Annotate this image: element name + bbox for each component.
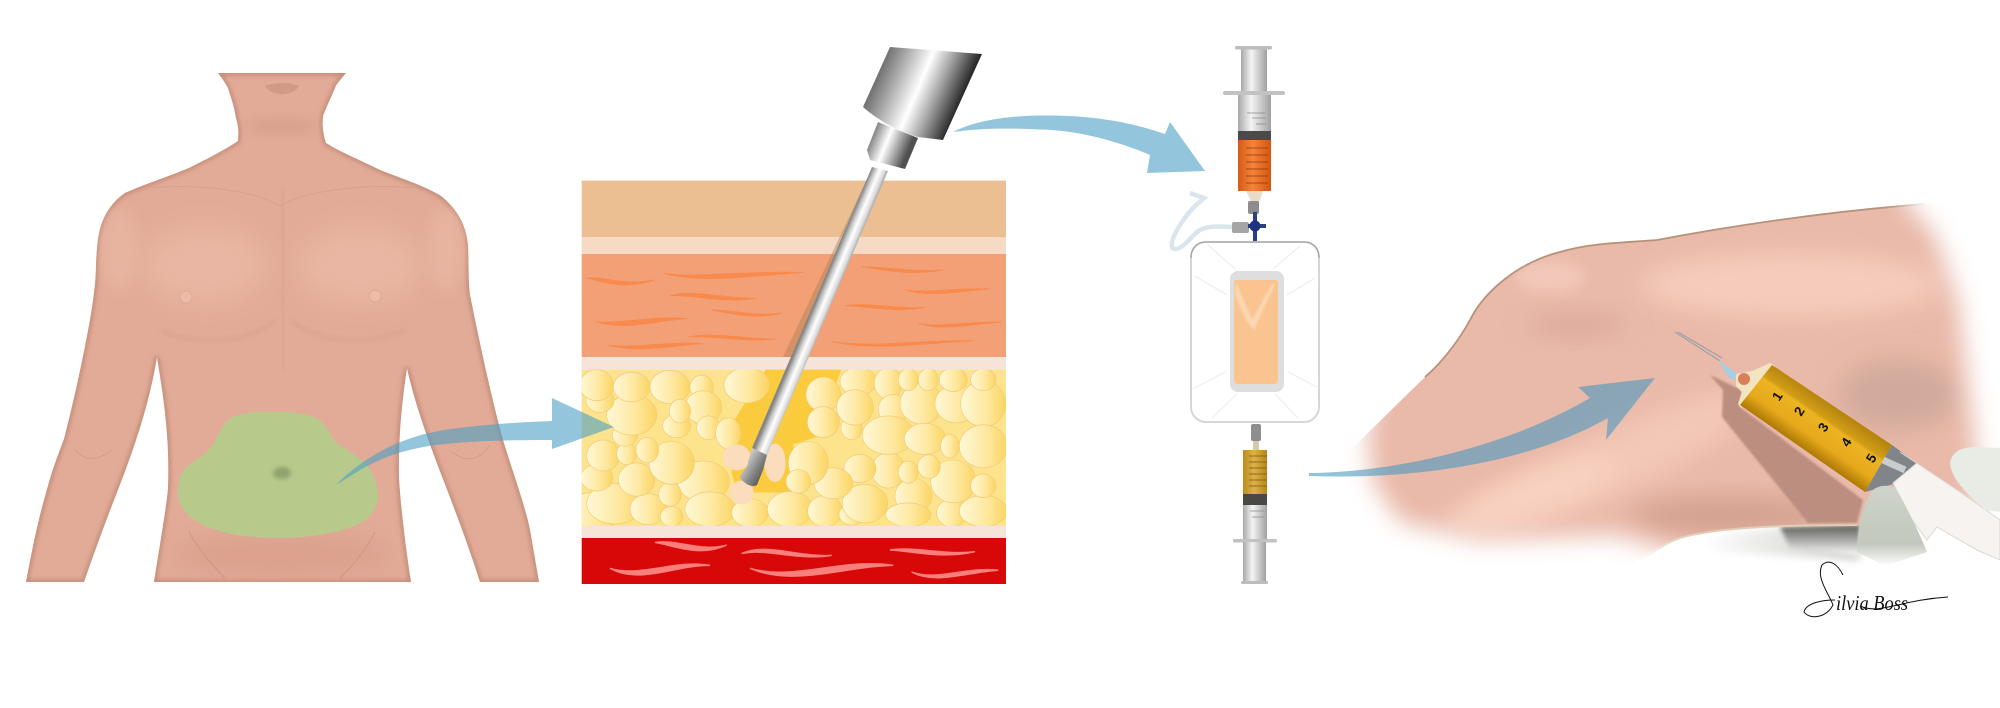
needle xyxy=(1675,332,1722,361)
skin layer xyxy=(582,181,1006,237)
injection syringe xyxy=(1675,332,2000,560)
fascia band bottom xyxy=(582,526,1006,538)
dermis band xyxy=(582,237,1006,254)
cannula shaft xyxy=(752,167,888,455)
volume numbers: 1 xyxy=(1769,389,1786,404)
collar xyxy=(867,122,918,165)
panel: patient torso with donor site xyxy=(26,73,539,582)
handle block xyxy=(863,47,982,140)
fat layer base xyxy=(582,370,1006,526)
volume numbers: 2 xyxy=(1791,404,1808,419)
three-way stopcock xyxy=(1232,201,1266,242)
rubber plunger ring xyxy=(1865,445,1917,492)
muscle-fascia orange layer xyxy=(582,254,1006,357)
green donor area xyxy=(178,412,378,538)
gloved finger xyxy=(1950,447,2000,512)
shadow beneath arm xyxy=(1700,525,1860,560)
red muscle layer xyxy=(582,538,1006,584)
arrow: cannula to syringe xyxy=(953,115,1205,173)
arm lower contour xyxy=(1640,525,1857,560)
red fibres xyxy=(610,542,998,578)
lips xyxy=(265,83,299,94)
panel: injection into the arm xyxy=(1354,203,2000,564)
arrow: syringe to injection site xyxy=(1309,378,1655,477)
syringe shoulder xyxy=(1736,363,1775,408)
panel: tissue layers cross-section xyxy=(563,181,1007,584)
volume numbers xyxy=(1769,389,1880,466)
syringe cast shadow xyxy=(1710,375,1863,523)
infographic: fat graft procedure xyxy=(26,46,2000,618)
volume numbers: 5 xyxy=(1863,451,1880,466)
nipples xyxy=(180,290,381,303)
gloved thumb xyxy=(1857,486,1927,566)
collar ring xyxy=(867,138,918,169)
orange fibres xyxy=(587,267,1002,349)
blood bag xyxy=(1191,242,1319,422)
elbow creases xyxy=(75,445,490,459)
torso silhouette xyxy=(26,73,539,582)
volume numbers: 4 xyxy=(1838,435,1855,450)
lower syringe with amber fat xyxy=(1233,450,1277,584)
inguinal creases xyxy=(189,532,375,578)
lower connector xyxy=(1251,424,1261,450)
navel xyxy=(273,467,291,479)
drainage tube xyxy=(1172,193,1232,249)
signature flourish xyxy=(1804,562,1948,617)
volume numbers: 3 xyxy=(1815,420,1832,435)
yellow barrel xyxy=(1740,365,1892,492)
plunger body xyxy=(1893,452,2000,560)
drop of fat in hub xyxy=(1738,373,1750,385)
cannula tip xyxy=(740,448,767,486)
arm skin xyxy=(1354,203,1990,558)
arm upper contour xyxy=(1425,204,1925,377)
arrow: abdomen to fat layer xyxy=(336,398,614,485)
shaft shadow on skin xyxy=(783,181,873,357)
panel: processing kit xyxy=(1172,46,1319,584)
cannula xyxy=(740,47,982,486)
upper syringe with orange fluid xyxy=(1223,46,1285,203)
needle hub xyxy=(1718,360,1736,380)
fascia band top xyxy=(582,357,1006,370)
collarbone lines xyxy=(150,187,415,206)
artist signature xyxy=(1804,562,1948,617)
fat globules xyxy=(563,367,1007,530)
signature text: ilvia Boss xyxy=(1836,591,1908,615)
